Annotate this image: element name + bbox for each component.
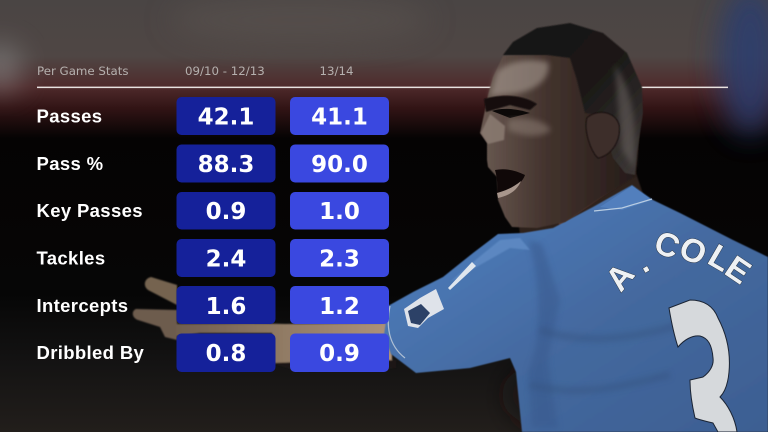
column headings: Per Game Stats (37, 64, 129, 78)
row: Tackles: 2.3 (319, 246, 360, 272)
forehead highlight (490, 60, 549, 96)
row: Passes (36, 97, 389, 135)
row: Key Passes: 0.9 (206, 199, 246, 225)
row: Dribbled By (36, 334, 389, 372)
shirt name: L (702, 237, 738, 279)
row: Tackles: Tackles (36, 248, 105, 268)
hair (503, 23, 643, 175)
row: Pass %: Pass % (36, 153, 103, 174)
row: Pass %: 88.3 (198, 152, 254, 178)
sleeve badge (404, 289, 444, 328)
row: Pass %: 90.0 (311, 152, 368, 178)
shirt name: O (674, 228, 713, 273)
open mouth (495, 169, 525, 193)
arm and hand (133, 277, 396, 372)
row: Intercepts (36, 286, 389, 324)
shirt name: A (598, 256, 641, 298)
face (480, 50, 640, 228)
row: Key Passes: 1.0 (319, 199, 360, 225)
row: Dribbled By: Dribbled By (36, 342, 145, 363)
ear (586, 113, 619, 158)
stubble highlight (615, 65, 635, 168)
row: Dribbled By: 0.8 (206, 341, 246, 367)
shirt name: E (719, 248, 758, 291)
row: Passes: Passes (36, 106, 102, 126)
brow and eye (484, 96, 537, 112)
head (480, 23, 643, 228)
shirt (384, 185, 768, 432)
player photo illustration (133, 23, 768, 432)
row: Pass % (36, 144, 389, 182)
column headings: 09/10 - 12/13 (185, 64, 265, 78)
shirt name: C (649, 223, 685, 266)
shirt number 3 (669, 300, 737, 432)
column headings (37, 64, 354, 78)
panel: stats table (36, 64, 389, 372)
row: Intercepts: Intercepts (36, 295, 128, 316)
row: Intercepts: 1.6 (206, 294, 246, 320)
nose (481, 114, 505, 144)
cheek highlight (508, 118, 551, 136)
row: Passes: 42.1 (198, 104, 254, 130)
row: Dribbled By: 0.9 (319, 341, 360, 367)
row: Intercepts: 1.2 (319, 294, 360, 320)
row: Passes: 41.1 (311, 104, 368, 130)
row: Key Passes: Key Passes (36, 200, 143, 221)
row: Key Passes (36, 192, 389, 230)
row: Tackles (36, 239, 389, 277)
shirt name (598, 223, 758, 298)
neck (515, 170, 645, 235)
row: Tackles: 2.4 (206, 246, 246, 272)
column headings: 13/14 (320, 64, 354, 78)
header rule (37, 87, 728, 88)
shirt name: . (629, 243, 655, 280)
